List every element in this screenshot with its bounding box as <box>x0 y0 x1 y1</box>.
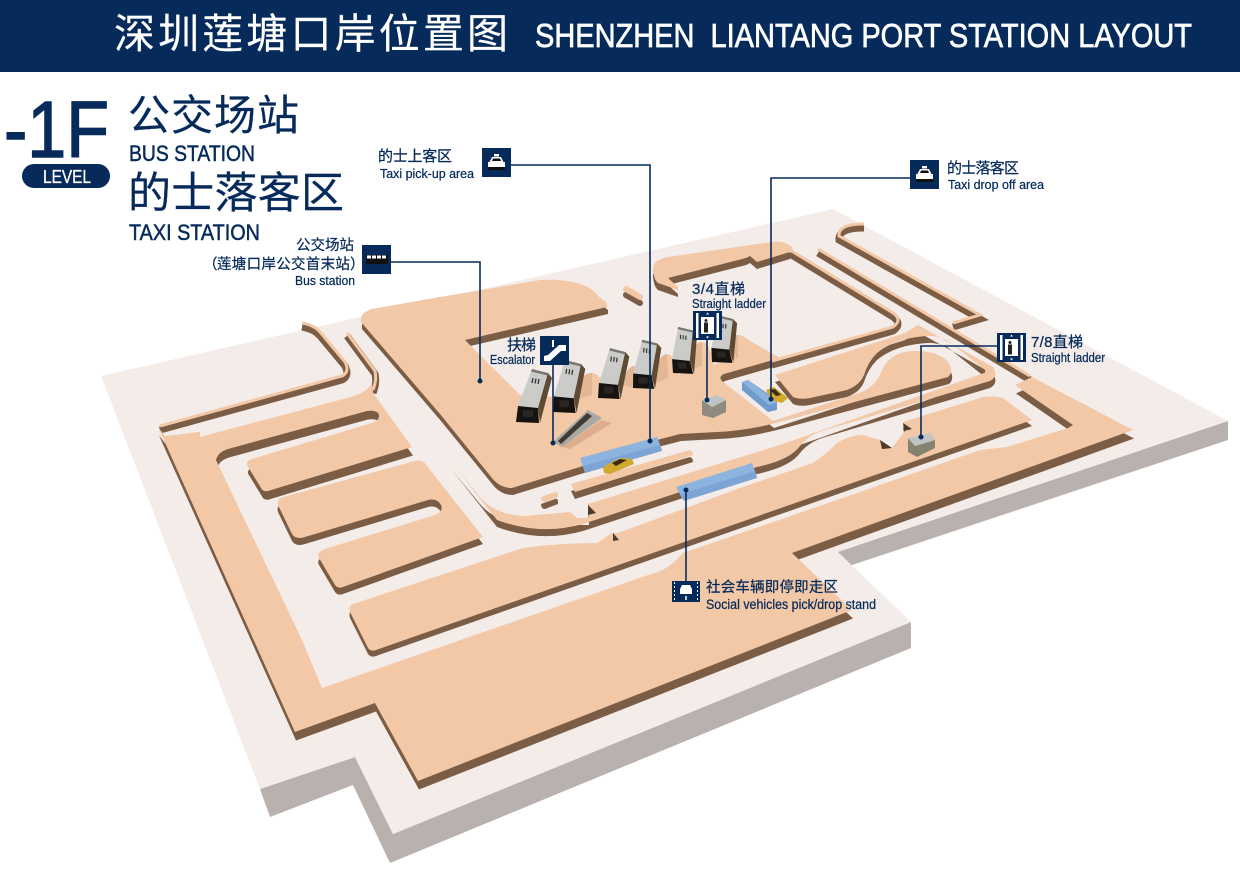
level pill: LEVEL <box>43 167 91 187</box>
heading: bus station and taxi station <box>128 92 344 245</box>
7/8 leader line <box>918 346 997 440</box>
salmon road surfaces <box>158 224 1133 781</box>
raised walls <box>159 228 1134 790</box>
callout: taxi drop off <box>768 160 1045 402</box>
escalator <box>553 410 612 449</box>
taxi station Chinese: 的士落客区 <box>128 170 344 218</box>
taxi icon <box>482 148 511 177</box>
3/4 leader line <box>704 340 710 402</box>
social labels: Social vehicles pick/drop stand <box>706 597 876 612</box>
escalator leader line <box>550 365 556 446</box>
callout: escalator <box>490 336 569 446</box>
pick-up leader line <box>511 165 652 444</box>
callout: social vehicles <box>672 488 876 612</box>
slab top <box>101 209 1228 834</box>
bus 2 <box>549 360 588 413</box>
taxi icon <box>910 160 939 189</box>
taxi at drop off <box>766 387 788 403</box>
drop off labels: 的士落客区 <box>947 160 1019 177</box>
elevator icon <box>997 333 1026 362</box>
social labels <box>706 579 876 612</box>
title banner <box>0 0 1240 72</box>
bus labels <box>203 236 365 288</box>
bus 3 <box>595 348 632 399</box>
7/8 labels: 7/8直梯 <box>1031 334 1083 351</box>
elevator icon <box>693 311 722 340</box>
escalator labels: 扶梯 <box>507 337 536 354</box>
callout: 7/8 ladder <box>918 333 1106 440</box>
3/4 labels: 3/4直梯 <box>692 281 745 298</box>
bus icon <box>362 245 391 274</box>
taxis <box>603 387 788 474</box>
social vehicle icon <box>672 581 700 602</box>
bus labels: Bus station <box>295 273 355 288</box>
escalator labels <box>490 337 536 367</box>
elevator box 3/4 <box>702 395 726 418</box>
pick-up labels: 的士上客区 <box>378 148 452 165</box>
escalator icon <box>540 336 569 365</box>
buses <box>516 315 744 423</box>
pick-up labels <box>378 148 475 181</box>
callout: taxi pick-up <box>378 148 652 444</box>
floor number: -1F <box>4 85 109 174</box>
title: Chinese: 深圳莲塘口岸位置图 <box>114 11 508 57</box>
slab shadow: front side <box>260 622 911 863</box>
7/8 labels <box>1031 334 1106 365</box>
bus labels: ） <box>350 256 365 273</box>
drop off leader line <box>768 178 910 402</box>
drop off labels <box>947 160 1045 192</box>
blue zone: taxi pick-up <box>580 437 662 473</box>
3/4 labels <box>692 281 767 311</box>
floor patch hiding walls behind the bus bays <box>472 312 782 400</box>
bus station Chinese: 公交场站 <box>128 92 299 139</box>
blue zone: social vehicles <box>676 463 757 501</box>
bus 6 <box>704 315 744 363</box>
3/4 labels: Straight ladder <box>692 296 767 311</box>
bus 1 <box>516 369 552 423</box>
7/8 labels: Straight ladder <box>1031 350 1106 365</box>
floor plan base slab <box>101 209 1228 863</box>
blue zone: taxi drop off <box>742 380 777 412</box>
taxi at pick-up <box>603 458 634 474</box>
social labels: 社会车辆即停即走区 <box>706 579 838 596</box>
pick-up labels: Taxi pick-up area <box>380 166 475 181</box>
bus labels: （ <box>203 256 218 273</box>
bus 4 <box>628 340 666 389</box>
social leader line <box>684 488 688 581</box>
callout: bus station <box>203 236 482 384</box>
shaded bus bays <box>575 335 738 400</box>
level badge <box>4 85 110 188</box>
bus station English: BUS STATION <box>129 141 255 166</box>
bus labels: 公交场站 <box>296 236 354 254</box>
taxi station English: TAXI STATION <box>129 220 260 245</box>
elevator box 7/8 <box>908 433 935 457</box>
callout: 3/4 ladder <box>692 281 767 402</box>
bus 5 <box>664 327 704 374</box>
escalator labels: Escalator <box>490 353 535 367</box>
bus leader line <box>391 262 482 384</box>
blue pick-up zones <box>580 380 777 501</box>
slab shadow: right side <box>836 421 1228 567</box>
drop off labels: Taxi drop off area <box>948 177 1045 192</box>
bus labels: 莲塘口岸公交首末站 <box>217 255 350 273</box>
